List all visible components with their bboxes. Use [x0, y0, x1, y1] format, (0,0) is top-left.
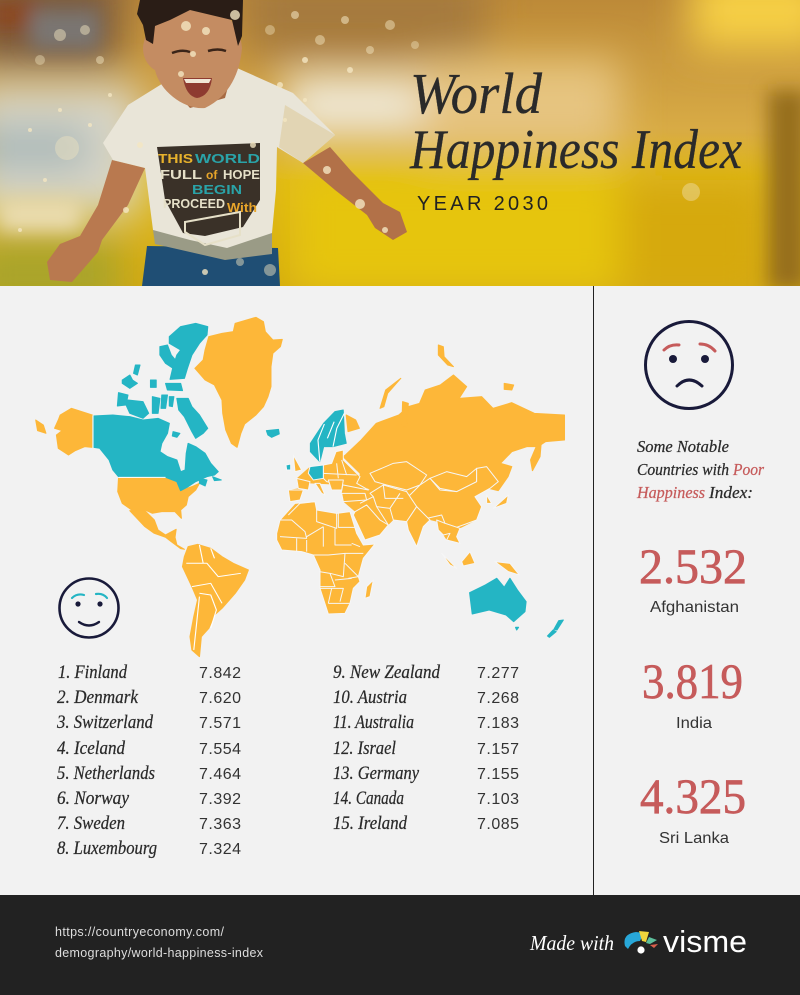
ranking list: left column: 2. Denmark: [57, 687, 139, 708]
americas and nordic borders: [93, 413, 344, 650]
ranking list: left column: 3. Switzerland: [56, 712, 153, 733]
ranking list: right column: 10. Austria: [333, 687, 407, 708]
title: Happiness Index: [409, 119, 742, 181]
stat: Afghanistan: Afghanistan: [650, 599, 739, 616]
poor happiness heading: Index:: [708, 483, 753, 502]
poor happiness heading: [636, 437, 764, 502]
hero photo: laughing child running through sprinkler: [0, 0, 800, 310]
stat: Afghanistan: 2.532: [639, 538, 747, 594]
ranking list: right column: 11. Australia: [333, 712, 414, 733]
ranking list: left column: 7.324: [199, 841, 241, 858]
child figure: [47, 0, 407, 286]
icon: sad face: [646, 322, 732, 408]
poor happiness heading: Countries with: [637, 460, 729, 479]
title: World: [410, 61, 543, 126]
poor happiness heading: Some Notable: [637, 437, 729, 456]
europe, africa and asia borders: [280, 460, 403, 603]
ranking list: left column: 4. Iceland: [57, 738, 125, 759]
ranking list: right column: 7.155: [477, 766, 519, 783]
source link: https://countryeconomy.com/: [55, 925, 225, 939]
ranking list: right column: [333, 662, 519, 834]
teal europe: [286, 464, 323, 480]
ranking list: left column: 7.363: [199, 816, 241, 833]
stat: India: India: [676, 715, 712, 732]
icon: visme logo: [624, 931, 658, 954]
made with: Made with: [529, 931, 614, 955]
ranking list: right column: 7.277: [477, 665, 519, 682]
ranking list: right column: 15. Ireland: [333, 813, 407, 834]
world map: [36, 317, 564, 657]
ranking list: left column: 7.842: [199, 665, 241, 682]
eyes: [172, 50, 226, 53]
stat: Afghanistan: [639, 538, 747, 616]
ranking list: right column: 7.183: [477, 715, 519, 732]
head: [143, 6, 242, 108]
visme wordmark: visme: [663, 924, 747, 959]
shirt print: [157, 143, 260, 236]
child figure: With: [227, 200, 257, 215]
ranking list: right column: 7.085: [477, 816, 519, 833]
ranking list: right column: 12. Israel: [333, 738, 396, 759]
ranking list: left column: 7. Sweden: [57, 813, 125, 834]
ranking list: left column: 7.571: [199, 715, 241, 732]
child figure: HOPE: [223, 167, 260, 182]
child figure: BEGIN: [192, 182, 242, 197]
divider: [593, 286, 594, 895]
child figure: FULL: [160, 167, 202, 182]
europe, africa and asia: [277, 450, 519, 614]
child figure: WORLD: [195, 151, 260, 166]
child figure: PROCEED: [163, 196, 225, 211]
hair: [137, 0, 243, 46]
stat: Sri Lanka: [640, 768, 746, 847]
waist band: [153, 230, 272, 260]
child figure: of: [206, 168, 218, 182]
americas, greenland, russia: [36, 317, 564, 657]
ranking list: left column: 7.392: [199, 791, 241, 808]
stat: India: [642, 653, 743, 732]
poor happiness heading: Poor: [732, 460, 764, 479]
poor happiness heading: Happiness: [636, 483, 705, 502]
left arm: [47, 160, 145, 282]
stat: Sri Lanka: Sri Lanka: [659, 830, 729, 847]
ranking list: right column: 9. New Zealand: [333, 662, 440, 683]
source link: [55, 925, 264, 960]
ranking list: left column: 6. Norway: [57, 788, 130, 809]
ranking list: left column: 1. Finland: [58, 662, 127, 683]
ranking list: left column: [56, 662, 241, 859]
source link: demography/world-happiness-index: [55, 946, 264, 960]
ranking list: right column: 14. Canada: [333, 788, 404, 809]
ranking list: left column: 7.620: [199, 690, 241, 707]
mouth: [183, 78, 212, 98]
right arm: [303, 147, 407, 240]
ranking list: right column: 7.268: [477, 690, 519, 707]
landmass base: asia and europe: [288, 467, 498, 547]
ranking list: right column: 7.157: [477, 741, 519, 758]
ranking list: right column: 13. Germany: [333, 763, 419, 784]
ranking list: left column: 5. Netherlands: [57, 763, 155, 784]
neck: [188, 90, 228, 108]
ranking list: left column: 7.554: [199, 741, 241, 758]
child figure: THIS: [158, 151, 193, 166]
footer bar: [0, 895, 800, 995]
subtitle: year: YEAR 2030: [417, 193, 548, 215]
teal countries: canada, iceland, nordics, australia, new zealand: [93, 323, 563, 637]
stat: Sri Lanka: 4.325: [640, 768, 746, 824]
water droplets: [18, 10, 700, 276]
ranking list: left column: 7.464: [199, 766, 241, 783]
stat: India: 3.819: [642, 653, 743, 709]
t-shirt: [103, 68, 335, 248]
title: [409, 61, 742, 181]
jeans: [142, 246, 280, 286]
ranking list: right column: 7.103: [477, 791, 519, 808]
ranking list: left column: 8. Luxembourg: [57, 838, 157, 859]
icon: happy face: [60, 578, 118, 638]
